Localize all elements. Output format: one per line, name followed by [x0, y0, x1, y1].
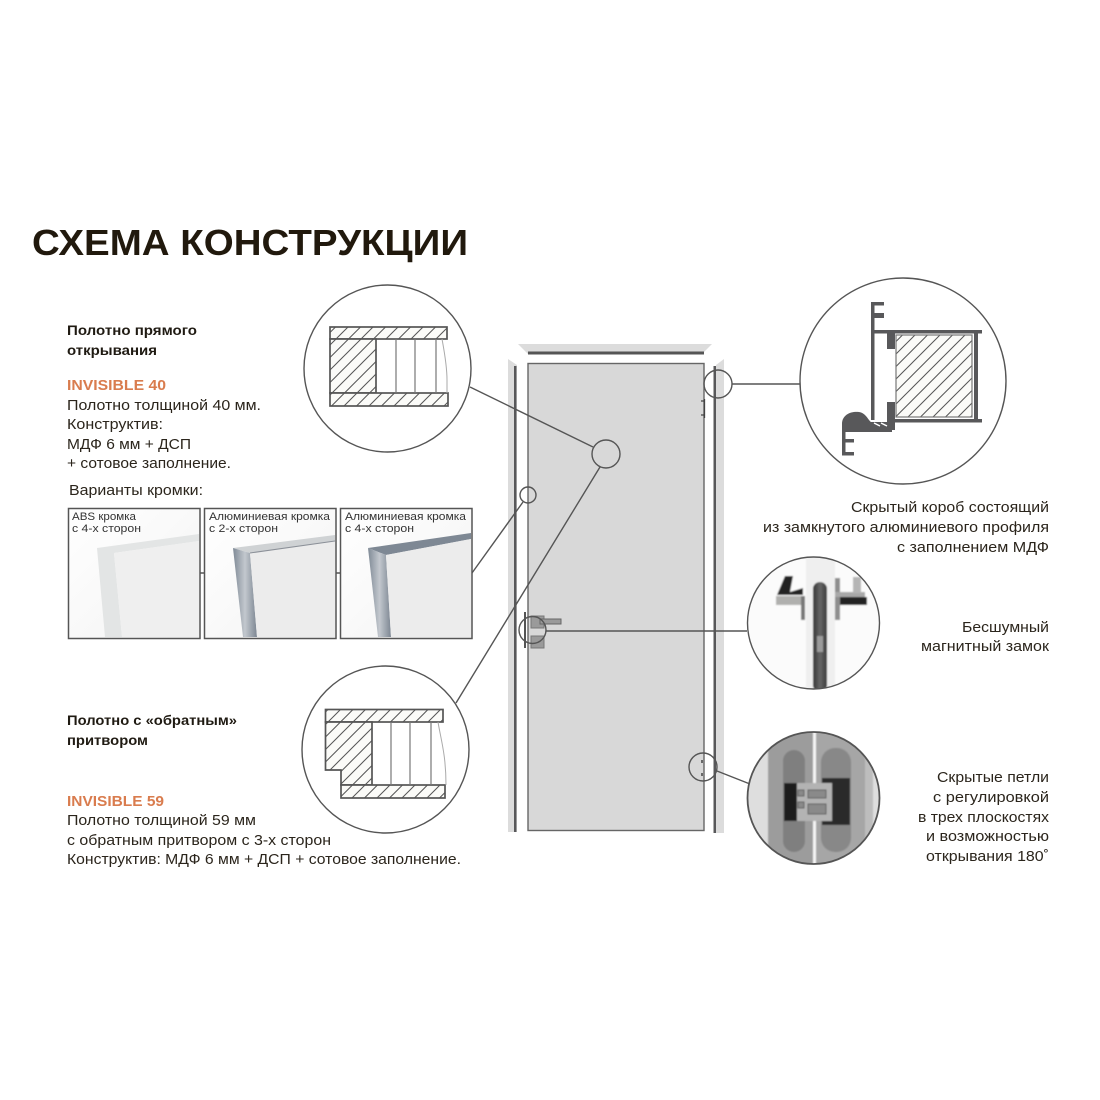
connector lines between edge panels — [200, 572, 340, 574]
caption: hidden hinges: в трех плоскостях — [918, 810, 1050, 826]
title: СХЕМА КОНСТРУКЦИИ — [32, 222, 468, 263]
caption: hidden box: Скрытый короб состоящий — [851, 500, 1049, 516]
caption: hidden hinges: и возможностью — [926, 829, 1049, 845]
caption: hidden box: из замкнутого алюминиевого профиля — [763, 520, 1049, 536]
caption: hidden hinges: Скрытые петли — [937, 770, 1049, 786]
text block: Invisible 59: Полотно толщиной 59 мм — [67, 813, 256, 829]
detail circle: Invisible 40 section — [304, 285, 471, 452]
text block: Invisible 59: Конструктив: МДФ 6 мм + ДСП + сотовое заполнение. — [67, 852, 461, 868]
left jamb — [508, 359, 517, 832]
caption: magnetic lock — [921, 620, 1050, 655]
caption: hidden box — [763, 500, 1049, 556]
panel: aluminium edge four sides: Алюминиевая кромка — [345, 511, 467, 523]
lower hinge mark — [701, 760, 703, 776]
door frame top — [518, 344, 712, 354]
door handle — [524, 612, 561, 648]
text block: Invisible 40: МДФ 6 мм + ДСП — [67, 437, 191, 453]
detail circle: Invisible 59 section — [302, 666, 469, 833]
text block: Invisible 40: INVISIBLE 40 — [67, 377, 166, 394]
text block: Invisible 40: Полотно толщиной 40 мм. — [67, 398, 261, 414]
caption: hidden hinges — [918, 770, 1050, 865]
detail circle: magnetic lock photo — [747, 557, 881, 692]
text block: Invisible 59: притвором — [67, 733, 148, 748]
panel: aluminium edge four sides: с 4-х сторон — [345, 523, 414, 535]
text block: Invisible 40: открывания — [67, 343, 157, 358]
panel: aluminium edge two sides: Алюминиевая кромка — [209, 511, 331, 523]
caption: magnetic lock: магнитный замок — [921, 639, 1050, 655]
detail circle: hidden hinge photo — [747, 732, 881, 865]
caption: hidden hinges: открывания 180˚ — [926, 849, 1049, 865]
panel: aluminium edge two sides — [204, 508, 336, 638]
caption: hidden hinges: с регулировкой — [933, 790, 1049, 806]
panel: ABS edge: с 4-х сторон — [72, 523, 141, 535]
text block: Invisible 59 — [67, 713, 461, 868]
text block: Invisible 40: Конструктив: — [67, 417, 163, 433]
upper hinge mark — [701, 399, 704, 418]
text block: Invisible 59: с обратным притвором с 3-х сторон — [67, 833, 331, 849]
heading: edge variants: Варианты кромки: — [69, 483, 203, 499]
panel: aluminium edge two sides: с 2-х сторон — [209, 523, 278, 535]
panel: aluminium edge four sides — [340, 508, 472, 638]
door leaf — [528, 364, 704, 830]
text block: Invisible 40 — [67, 323, 261, 472]
text block: Invisible 40: + сотовое заполнение. — [67, 456, 231, 472]
text block: Invisible 59: INVISIBLE 59 — [67, 793, 164, 810]
caption: hidden box: с заполнением МДФ — [897, 540, 1049, 556]
text block: Invisible 40: Полотно прямого — [67, 323, 197, 338]
panel: ABS edge: ABS кромка — [72, 511, 137, 523]
panel: ABS edge — [68, 508, 200, 638]
leader lines and detail markers — [456, 370, 800, 784]
door diagram — [508, 344, 724, 833]
detail circle: aluminium box profile — [800, 278, 1006, 484]
right jamb — [716, 359, 724, 833]
text block: Invisible 59: Полотно с «обратным» — [67, 713, 237, 728]
caption: magnetic lock: Бесшумный — [962, 620, 1049, 636]
